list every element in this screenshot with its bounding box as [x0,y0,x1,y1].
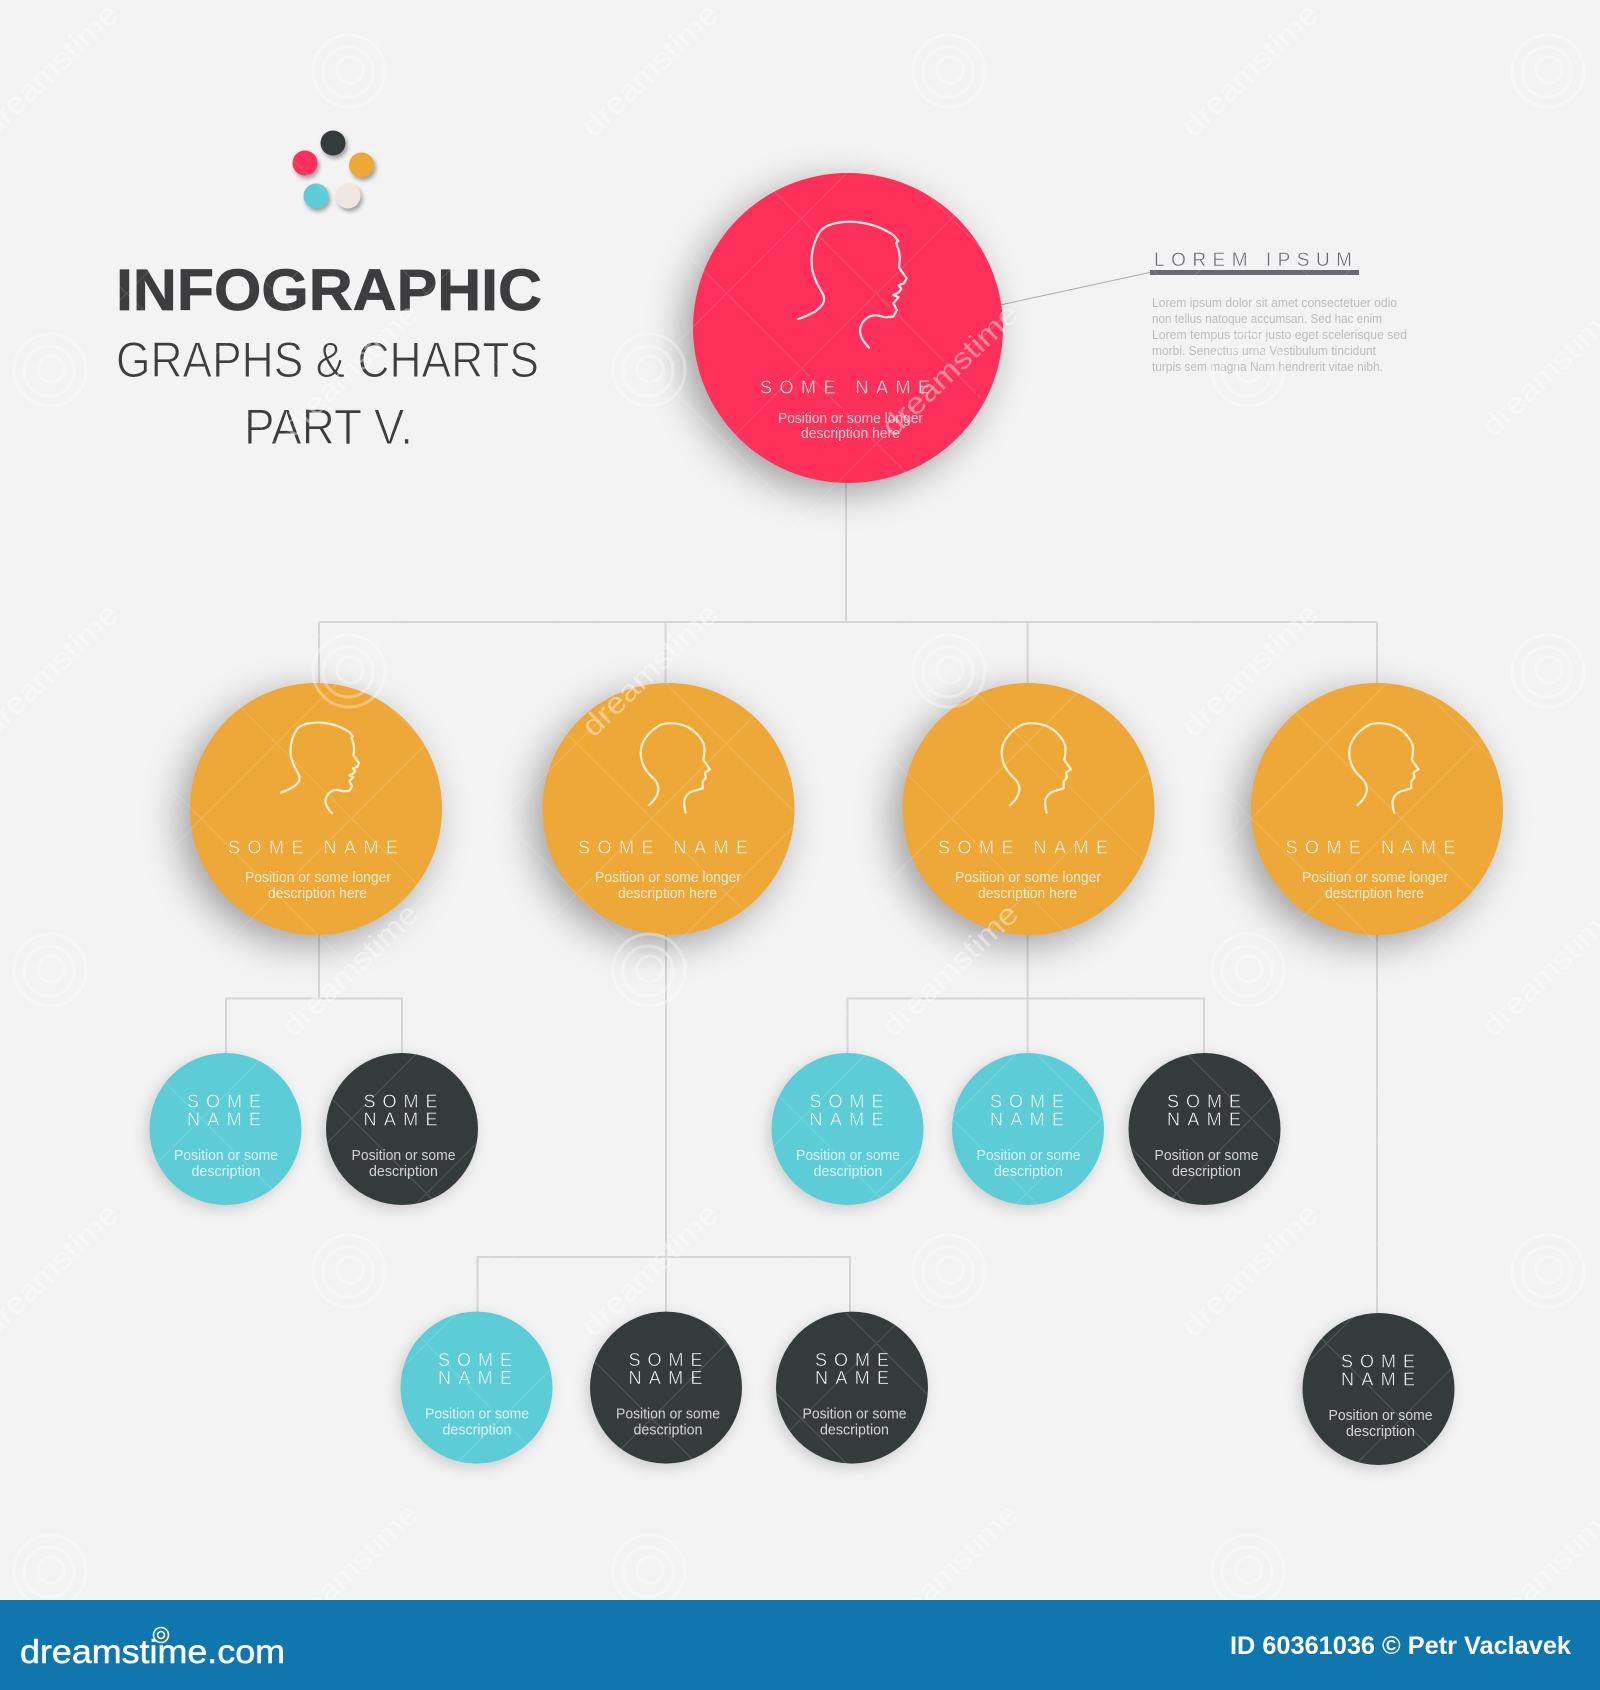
panel: teal circle, group 3 middle [952,1053,1104,1205]
callout: lorem ipsum text block: turpis sem magna Nam hendrerit vitae nibh. [1152,359,1383,374]
panel: teal circle, group 1: description [192,1163,260,1180]
panel: teal circle, group 3 left: SOME [810,1092,884,1112]
icon: head outline [798,222,907,348]
panel: orange circle 2: Position or some longer [595,869,741,886]
watermark overlay: dreamstime [276,297,425,443]
connector lines of the org chart [226,483,1377,1313]
panel: dark circle, group 3 right: NAME [1167,1110,1241,1130]
panel: teal circle, group 3 left [772,1053,924,1205]
panel: teal circle, group 2 left: SOME [438,1350,512,1370]
panel: teal circle, group 1: NAME [187,1110,261,1130]
icon: head outline [1349,723,1418,813]
title [116,258,542,455]
watermark overlay: dreamstime [876,297,1025,443]
panel: dark circle, group 3 right: SOME [1167,1092,1241,1112]
panel: teal circle, group 2 left [400,1312,552,1464]
footer banner: ID 60361036 © Petr Vaclavek [1230,1632,1571,1660]
panel: top red circle [693,173,1003,483]
panel: orange circle 4: description here [1325,885,1424,902]
panel: dark circle, group 3 right: description [1172,1163,1241,1180]
panel: teal circle, group 2 left: Position or some [425,1406,529,1422]
watermark overlay: dreamstime [876,897,1025,1043]
callout: lorem ipsum text block: LOREM IPSUM [1154,250,1352,271]
panel: dark circle, group 3 right [1128,1053,1280,1205]
panel: top red circle: Position or some longer [778,410,923,427]
watermark overlay: dreamstime [276,1497,425,1643]
panel: dark circle, group 1: NAME [364,1110,438,1130]
panel: teal circle, group 2 left: NAME [438,1368,512,1388]
icon: dreamstime spiral [154,1628,168,1642]
panel: teal circle, group 3 left: NAME [810,1110,884,1130]
panel: top red circle: SOME NAME [760,378,930,398]
panel: dark circle, group 2 right: SOME [815,1350,889,1370]
panel: orange circle 4: Position or some longer [1302,869,1448,886]
logo: five coloured dots [292,130,374,208]
panel: dark circle, group 2 middle: Position or some [616,1406,720,1422]
watermark overlay: dreamstime [576,597,725,743]
title: INFOGRAPHIC [116,258,542,323]
panel: dark circle, group 3 right: Position or some [1154,1147,1258,1164]
panel: teal circle, group 1: SOME [187,1092,261,1112]
panel: dark circle, group 1: SOME [364,1092,438,1112]
panel: dark circle, group 4: Position or some [1328,1407,1432,1424]
panel: teal circle, group 3 middle: Position or some [976,1147,1080,1164]
panel: dark circle, group 4 [1302,1313,1454,1465]
panel: teal circle, group 1 [150,1053,302,1205]
panel: orange circle 2: description here [618,885,717,902]
panel: orange circle 3: SOME NAME [938,838,1108,858]
panel: dark circle, group 2 right: NAME [815,1368,889,1388]
panel: teal circle, group 3 middle: SOME [990,1092,1064,1112]
panel: dark circle, group 2 middle [590,1312,742,1464]
footer banner: dreamstime.com [20,1633,285,1670]
panel: dark circle, group 1: description [369,1163,438,1180]
panel: dark circle, group 4: description [1346,1423,1415,1440]
callout: lorem ipsum text block: Lorem tempus tortor justo eget scelerisque sed [1152,327,1407,342]
panel: orange circle 3: description here [978,885,1077,902]
title: PART V. [244,399,413,455]
panel: orange circle 1: description here [268,885,367,902]
panel: dark circle, group 2 right: Position or some [802,1406,906,1422]
footer banner [0,1600,1600,1690]
panel: teal circle, group 2 left: description [442,1422,512,1438]
panel: teal circle, group 1: Position or some [174,1147,278,1164]
panel: teal circle, group 3 middle: description [994,1163,1063,1180]
panel: orange circle 1 [190,683,442,935]
panel: dark circle, group 2 right [776,1312,928,1464]
panel: orange circle 1: Position or some longer [245,869,391,886]
panel: orange circle 3: Position or some longer [955,869,1101,886]
panel: orange circle 4 [1251,683,1503,935]
watermark overlay: dreamstime [576,1197,725,1343]
watermark overlay: dreamstime [1176,597,1325,743]
watermark overlay: dreamstime [576,0,725,143]
watermark overlay: dreamstime [1176,0,1325,143]
panel: dark circle, group 4: SOME [1341,1352,1415,1372]
panel: dark circle, group 4: NAME [1341,1370,1415,1390]
panel: teal circle, group 3 middle: NAME [990,1110,1064,1130]
icon: head outline [641,723,710,813]
panel: orange circle 2: SOME NAME [578,838,748,858]
panel: teal circle, group 3 left: Position or some [796,1147,900,1164]
title: GRAPHS & CHARTS [116,332,539,388]
icon: head outline [1002,723,1071,813]
panel: dark circle, group 2 right: description [820,1422,889,1438]
callout: lorem ipsum text block: non tellus natoque accumsan. Sed hac enim [1152,311,1382,326]
panel: orange circle 4: SOME NAME [1286,838,1456,858]
callout: lorem ipsum text block [977,250,1407,374]
panel: dark circle, group 1 [326,1053,478,1205]
panel: dark circle, group 1: Position or some [352,1147,456,1164]
watermark overlay: dreamstime [876,1497,1025,1643]
panel: teal circle, group 3 left: description [814,1163,882,1180]
panel: top red circle: description here [801,425,900,442]
watermark overlay: dreamstime [1176,1197,1325,1343]
panel: dark circle, group 2 middle: description [634,1422,702,1438]
panel: dark circle, group 2 middle: NAME [628,1368,702,1388]
panel: orange circle 2 [542,683,794,935]
panel: orange circle 1: SOME NAME [228,838,398,858]
panel: dark circle, group 2 middle: SOME [628,1350,702,1370]
icon: head outline [281,723,359,813]
callout: lorem ipsum text block: morbi. Senectus urna Vestibulum tincidunt [1152,343,1376,358]
callout: lorem ipsum text block: Lorem ipsum dolor sit amet consectetuer odio [1152,295,1397,310]
watermark overlay: dreamstime [276,897,425,1043]
panel: orange circle 3 [902,683,1154,935]
